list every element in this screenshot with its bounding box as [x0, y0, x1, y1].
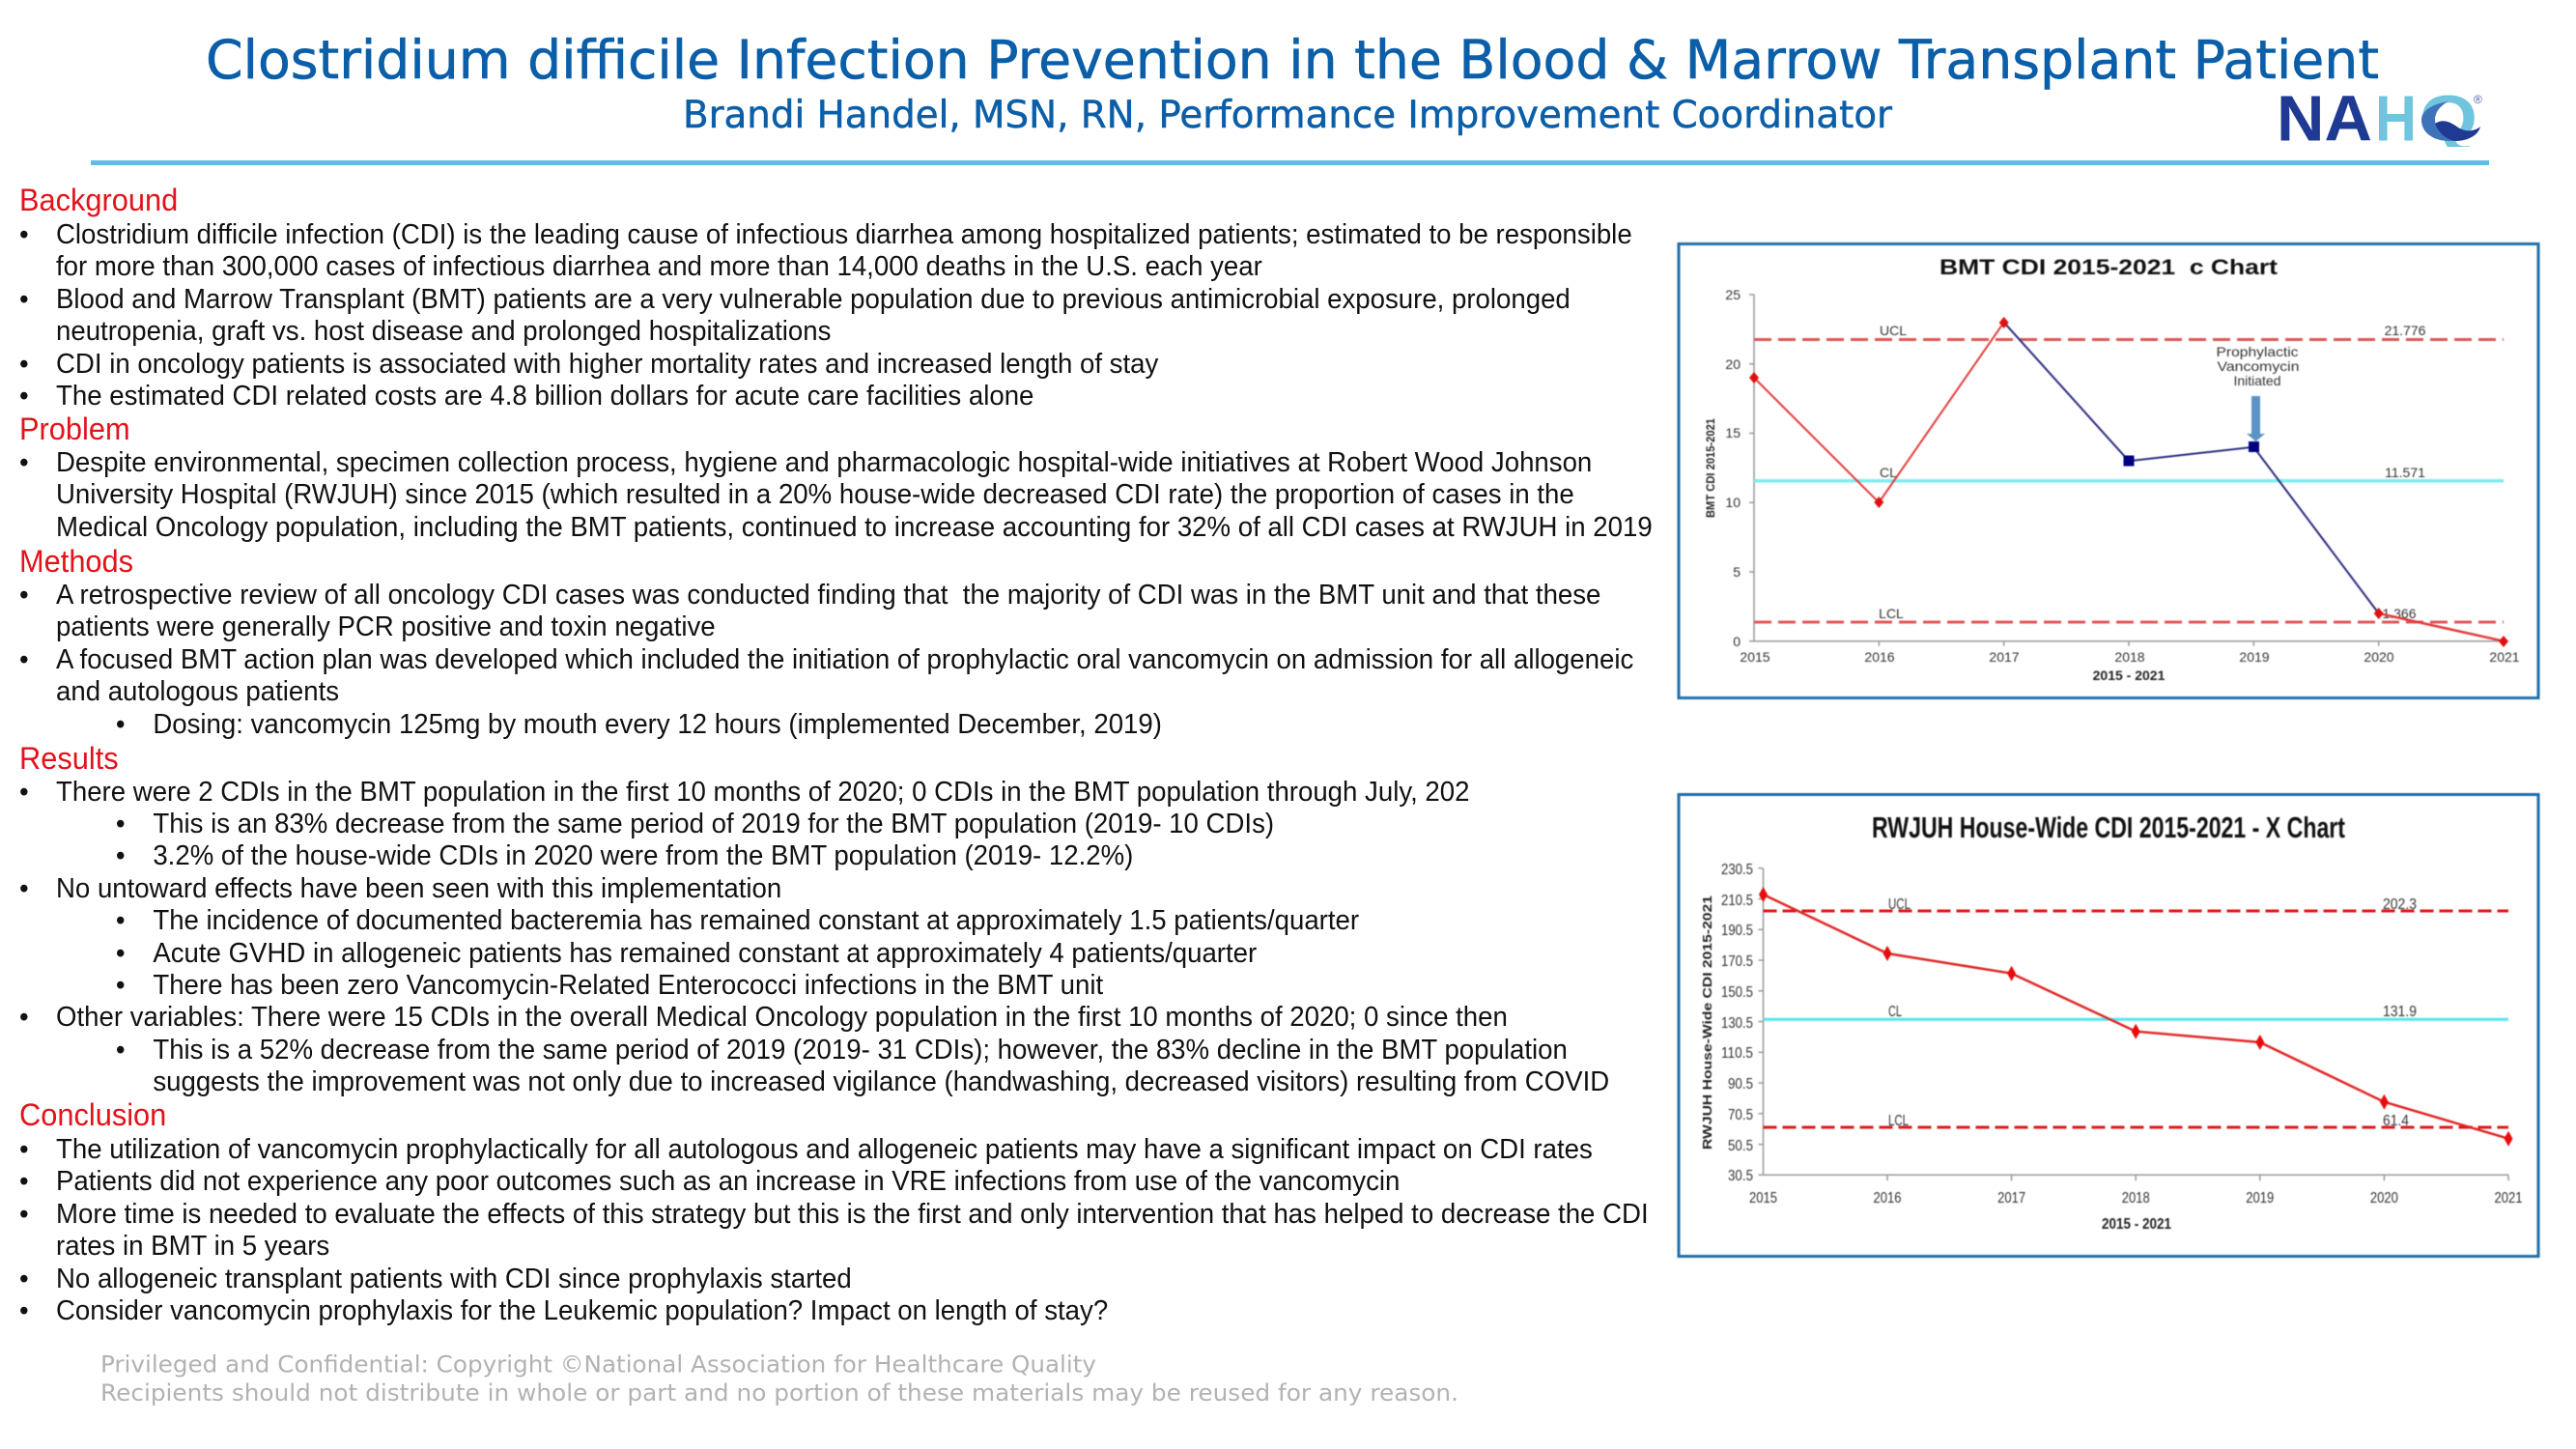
heading: Conclusion: Conclusion: [19, 1097, 166, 1132]
y axis: 50.5: [1728, 1138, 1753, 1154]
y axis: 70.5: [1728, 1107, 1753, 1123]
control limits: CL: [1880, 465, 1897, 480]
section: Conclusion: [19, 1097, 1649, 1326]
arrow: [2247, 396, 2265, 441]
section: Background: [19, 183, 1632, 412]
callout: prophylactic vancomycin initiated: Vancomycin: [2218, 358, 2299, 374]
x axis labels: 2021: [2489, 649, 2520, 665]
control limits: UCL: [1888, 896, 1911, 913]
bullet: There were 2 CDIs in the BMT population in the first 10 months of 2020; 0 CDIs in the BMT population through July, 202: [56, 777, 1469, 808]
bullet: No allogeneic transplant patients with CDI since prophylaxis started: [56, 1264, 852, 1294]
panel: BMT CDI c chart: [1677, 242, 2541, 699]
bullet: for more than 300,000 cases of infectious diarrhea and more than 14,000 deaths in the U.S. each year: [56, 251, 1262, 282]
callout: prophylactic vancomycin initiated: Initiated: [2233, 373, 2281, 388]
title: Clostridium difficile Infection Prevention in the Blood & Marrow Transplant Patient: [206, 29, 2379, 91]
bullet: University Hospital (RWJUH) since 2015 (which resulted in a 20% house-wide decreased CDI rate) the proportion of cases in the: [56, 479, 1574, 510]
control limits: LCL: [1879, 606, 1904, 621]
y axis: 30.5: [1728, 1168, 1753, 1184]
bullet: [19, 1199, 1673, 1264]
bullet: A focused BMT action plan was developed which included the initiation of prophylactic oral vancomycin on admission for all allogeneic: [56, 644, 1633, 675]
bullet: Despite environmental, specimen collection process, hygiene and pharmacologic hospital-wide initiatives at Robert Wood Johnson: [56, 447, 1592, 478]
control limits: [1764, 896, 2508, 1129]
section: Results: [19, 740, 1609, 1097]
heading: Problem: Problem: [19, 412, 130, 446]
sub-bullet: [19, 1035, 1673, 1099]
x axis labels: 2015: [1749, 1190, 1777, 1207]
control limits: 202.3: [2383, 896, 2417, 913]
bullet: The utilization of vancomycin prophylactically for all autologous and allogeneic patients may have a significant impact on CDI rates: [56, 1134, 1593, 1165]
control limits: 131.9: [2383, 1004, 2417, 1020]
x axis title: 2015 - 2021: [2093, 668, 2166, 683]
heading: Methods: Methods: [19, 543, 133, 578]
y axis: [1721, 862, 2508, 1184]
footer: confidentiality notice: [100, 1350, 1458, 1406]
bullet: [19, 447, 1673, 544]
y axis: 230.5: [1721, 862, 1753, 878]
sub-bullet: This is an 83% decrease from the same period of 2019 for the BMT population (2019- 10 CDIs): [153, 809, 1274, 839]
control limits: UCL: [1880, 323, 1907, 338]
control limits: [1754, 323, 2504, 622]
bullet: The estimated CDI related costs are 4.8 billion dollars for acute care facilities alone: [56, 381, 1033, 412]
heading: Results: Results: [19, 740, 119, 775]
bullet: Other variables: There were 15 CDIs in the overall Medical Oncology population in the first 10 months of 2020; 0 since then: [56, 1002, 1508, 1033]
bullet: [19, 644, 1673, 709]
footer: confidentiality notice: Recipients should not distribute in whole or part and no portion of these materials may be reused for any reason.: [100, 1379, 1458, 1406]
bullet: and autologous patients: [56, 676, 339, 707]
bullet: patients were generally PCR positive and toxin negative: [56, 611, 716, 642]
y axis: 5: [1733, 564, 1741, 580]
x axis title: 2015 - 2021: [2102, 1216, 2171, 1233]
x axis labels: 2018: [2114, 649, 2145, 665]
data markers: [1749, 317, 2508, 647]
y axis: 110.5: [1721, 1045, 1753, 1062]
y axis: 0: [1733, 634, 1741, 649]
control limits: 1.366: [2382, 606, 2417, 621]
bullet: CDI in oncology patients is associated with higher mortality rates and increased length of stay: [56, 349, 1158, 380]
y axis: 20: [1725, 356, 1741, 372]
y axis: 130.5: [1721, 1015, 1753, 1032]
header: title and presenter: [206, 29, 2379, 137]
data line: [1764, 895, 2508, 1139]
control limits: 21.776: [2385, 323, 2426, 338]
y axis: [1725, 287, 2504, 649]
section: Problem: [19, 412, 1653, 543]
data line: [1754, 323, 2504, 641]
x axis labels: 2019: [2239, 649, 2270, 665]
sub-bullet: suggests the improvement was not only due to increased vigilance (handwashing, decreased visitors) resulting from COVID: [153, 1066, 1609, 1097]
panel: RWJUH house-wide X chart: [1677, 793, 2541, 1258]
y axis: 170.5: [1721, 953, 1753, 970]
x axis labels: 2017: [1989, 649, 2020, 665]
chart title: RWJUH House-Wide CDI 2015-2021 - X Chart: [1872, 810, 2345, 844]
bullet: [19, 219, 1673, 284]
header rule: [91, 160, 2489, 165]
x axis labels: 2018: [2122, 1190, 2150, 1207]
sub-bullet: Acute GVHD in allogeneic patients has remained constant at approximately 4 patients/quarter: [153, 938, 1257, 969]
heading: Background: Background: [19, 183, 178, 217]
bullet: No untoward effects have been seen with this implementation: [56, 873, 781, 904]
sub-bullet: There has been zero Vancomycin-Related Enterococci infections in the BMT unit: [153, 970, 1103, 1001]
control limits: 11.571: [2385, 465, 2425, 480]
sub-bullet: 3.2% of the house-wide CDIs in 2020 were from the BMT population (2019- 12.2%): [153, 840, 1133, 871]
bullet: rates in BMT in 5 years: [56, 1231, 329, 1262]
x axis labels: 2020: [2370, 1190, 2398, 1207]
bullet: A retrospective review of all oncology CDI cases was conducted finding that the majority of CDI was in the BMT unit and that these: [56, 580, 1600, 611]
y axis title: RWJUH House-Wide CDI 2015-2021: [1700, 895, 1714, 1150]
y axis: 210.5: [1721, 893, 1753, 909]
callout: prophylactic vancomycin initiated: Prophylactic: [2216, 344, 2299, 359]
x axis labels: 2017: [1997, 1190, 2025, 1207]
x axis labels: 2015: [1740, 649, 1770, 665]
y axis: 25: [1725, 287, 1741, 302]
x axis labels: 2019: [2246, 1190, 2274, 1207]
bullet: Consider vancomycin prophylaxis for the Leukemic population? Impact on length of stay?: [56, 1295, 1108, 1326]
x axis labels: [1749, 1190, 2523, 1207]
logo: NAHQ: ®: [2474, 93, 2482, 106]
section: Methods: [19, 543, 1633, 740]
bullet: Blood and Marrow Transplant (BMT) patients are a very vulnerable population due to previous antimicrobial exposure, prolonged: [56, 284, 1571, 315]
x axis labels: 2021: [2494, 1190, 2523, 1207]
bullet: Patients did not experience any poor outcomes such as an increase in VRE infections from use of the vancomycin: [56, 1166, 1400, 1197]
x axis labels: 2016: [1864, 649, 1895, 665]
footer: confidentiality notice: Privileged and Confidential: Copyright ©National Association for Healthcare Quality: [100, 1350, 1096, 1378]
y axis title: BMT CDI 2015-2021: [1704, 418, 1717, 518]
control limits: CL: [1888, 1004, 1902, 1020]
bullet: neutropenia, graft vs. host disease and prolonged hospitalizations: [56, 316, 831, 347]
bullet: [19, 580, 1673, 644]
bullet: Clostridium difficile infection (CDI) is the leading cause of infectious diarrhea among hospitalized patients; estimated to be responsible: [56, 219, 1632, 250]
chart title: BMT CDI 2015-2021 c Chart: [1939, 255, 2279, 279]
data markers: [1759, 887, 2513, 1147]
callout: prophylactic vancomycin initiated: [2216, 344, 2299, 388]
bullet: More time is needed to evaluate the effects of this strategy but this is the first and only intervention that has helped to decrease the CDI: [56, 1199, 1649, 1230]
control limits: LCL: [1888, 1113, 1909, 1129]
logo: NAHQ: [2277, 87, 2482, 147]
x axis labels: [1740, 649, 2520, 665]
y axis: 150.5: [1721, 984, 1753, 1001]
sub-bullet: Dosing: vancomycin 125mg by mouth every 12 hours (implemented December, 2019): [153, 709, 1162, 740]
subtitle: presenter: Brandi Handel, MSN, RN, Performance Improvement Coordinator: [683, 94, 1893, 137]
x axis labels: 2020: [2364, 649, 2394, 665]
bullet: [19, 284, 1673, 349]
y axis: 10: [1725, 495, 1741, 510]
y axis: 90.5: [1728, 1076, 1753, 1093]
sub-bullet: This is a 52% decrease from the same period of 2019 (2019- 31 CDIs); however, the 83% decline in the BMT population: [153, 1035, 1568, 1065]
y axis: 15: [1725, 425, 1741, 440]
sub-bullet: The incidence of documented bacteremia has remained constant at approximately 1.5 patients/quarter: [153, 905, 1359, 936]
y axis: 190.5: [1721, 923, 1753, 939]
control limits: 61.4: [2383, 1113, 2409, 1129]
x axis labels: 2016: [1874, 1190, 1902, 1207]
bullet: Medical Oncology population, including the BMT patients, continued to increase accounting for 32% of all CDI cases at RWJUH in 2019: [56, 512, 1653, 543]
